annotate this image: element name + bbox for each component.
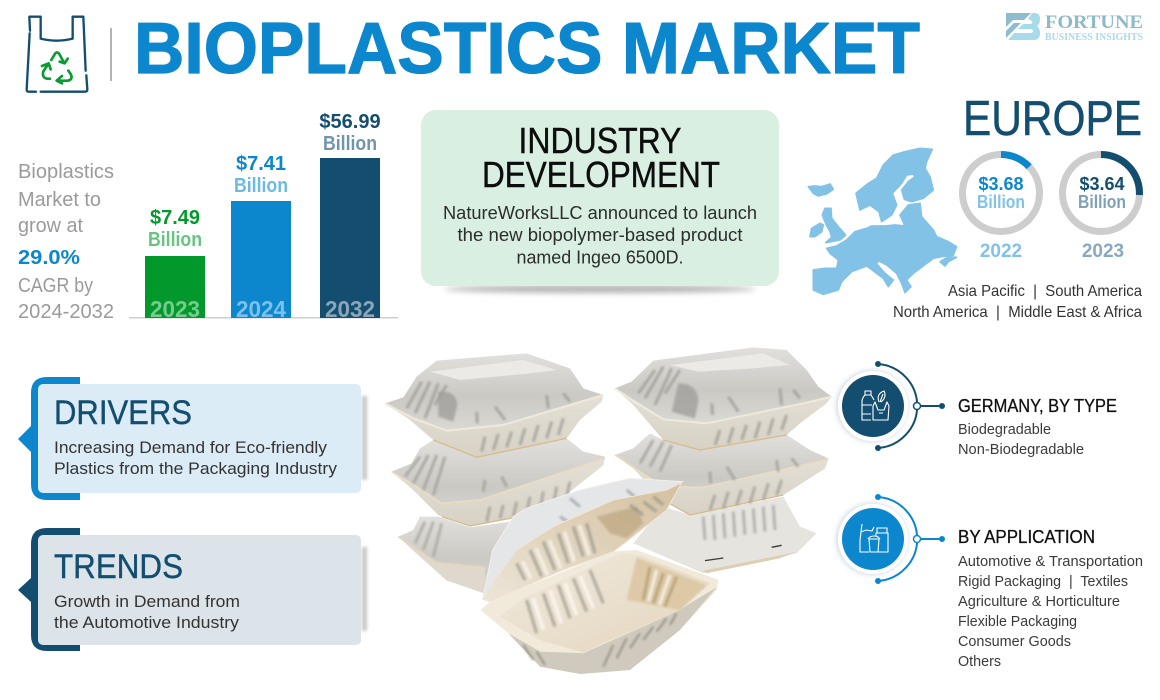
panel: trends: Growth in Demand from (54, 592, 240, 611)
text: by application (958, 527, 1143, 670)
map: Europe (808, 148, 957, 294)
text: Germany by type: GERMANY, BY TYPE (958, 396, 1117, 416)
donut: Europe 2023: $3.64 (1079, 174, 1125, 194)
text: by application: Consumer Goods (958, 633, 1071, 650)
panel: trends: TRENDS (54, 548, 183, 586)
logo: Fortune Business Insights (1006, 12, 1143, 43)
icon: bag, cup and carton badge (838, 504, 908, 574)
text: market growth summary: 29.0% (18, 247, 80, 269)
text: market growth summary (18, 161, 114, 323)
donut: Europe 2022: Billion (977, 192, 1025, 212)
text: market growth summary: grow at (18, 215, 83, 237)
right stack of containers (615, 347, 832, 573)
text: Germany by type: Biodegradable (958, 421, 1051, 438)
text: market growth summary: CAGR by (18, 275, 93, 297)
bar: 2032: 2032 (325, 296, 375, 322)
logo: Fortune Business Insights: BUSINESS INSIGHTS (1045, 32, 1143, 43)
bar: 2024: 2024 (236, 296, 286, 322)
icon: recycling bag (27, 17, 87, 92)
panel: industry development: named Ingeo 6500D. (516, 248, 684, 268)
panel: industry development: NatureWorksLLC announced to launch (443, 203, 757, 223)
bar: 2023: Billion (148, 229, 202, 251)
donut: Europe 2022: $3.68 (978, 174, 1024, 194)
donut: Europe 2023: Billion (1078, 192, 1126, 212)
bar: 2032 (319, 111, 381, 322)
text: market growth summary: 2024-2032 (18, 301, 114, 323)
text: by application: Agriculture & Horticulture (958, 593, 1120, 610)
panel: trends: the Automotive Industry (54, 613, 240, 632)
text: by application: Others (958, 653, 1001, 670)
text: by application: Rigid Packaging | Textiles (958, 573, 1128, 590)
bar chart: market size (129, 111, 398, 322)
open container (481, 478, 719, 674)
panel: industry development (421, 110, 779, 293)
photo: stacked compostable food containers (385, 347, 832, 674)
bar: 2024 (231, 153, 291, 322)
title: BIOPLASTICS MARKET (134, 9, 920, 89)
bar: 2023: $7.49 (150, 207, 200, 229)
bar: 2032: $56.99 (319, 111, 381, 133)
panel: industry development: the new biopolymer-based product (458, 225, 742, 245)
text: Germany by type: Non-Biodegradable (958, 441, 1084, 458)
text: other regions: Asia Pacific | South America (948, 283, 1142, 300)
donut: Europe 2022: 2022 (980, 241, 1022, 262)
text: other regions: North America | Middle East & Africa (893, 304, 1142, 321)
panel: drivers: Plastics from the Packaging Industry (54, 459, 338, 478)
connector: by application (838, 494, 945, 584)
donut: Europe 2023: 2023 (1082, 241, 1124, 262)
logo: Fortune Business Insights: FORTUNE (1045, 12, 1143, 33)
text: by application: Flexible Packaging (958, 613, 1077, 630)
connector: Germany by type (838, 361, 945, 451)
text: market growth summary: Bioplastics (18, 161, 114, 183)
panel: drivers (18, 377, 367, 500)
left stack of containers (385, 353, 605, 593)
text: by application: BY APPLICATION (958, 527, 1095, 547)
text: by application: Automotive & Transportation (958, 553, 1143, 570)
bar: 2024: Billion (234, 175, 288, 197)
text: Germany by type (958, 396, 1117, 458)
donut: Europe 2023 (1062, 154, 1140, 262)
panel: industry development: INDUSTRY (518, 120, 682, 161)
text: other regions (893, 283, 1142, 321)
text: market growth summary: Market to (18, 189, 101, 211)
bar: 2023: 2023 (150, 296, 200, 322)
icon: bottle and bag badge (838, 371, 908, 441)
icon: green recycling arrows (42, 52, 72, 83)
panel: drivers: DRIVERS (54, 394, 192, 432)
donut: Europe 2022 (962, 154, 1040, 262)
header divider (110, 28, 112, 81)
bar: 2032: Billion (323, 133, 377, 155)
bar: 2024: $7.41 (236, 153, 286, 175)
panel: drivers: Increasing Demand for Eco-friendly (54, 438, 327, 457)
bar: 2023 (145, 207, 205, 322)
panel: trends (18, 528, 367, 651)
panel: industry development: DEVELOPMENT (482, 154, 720, 195)
